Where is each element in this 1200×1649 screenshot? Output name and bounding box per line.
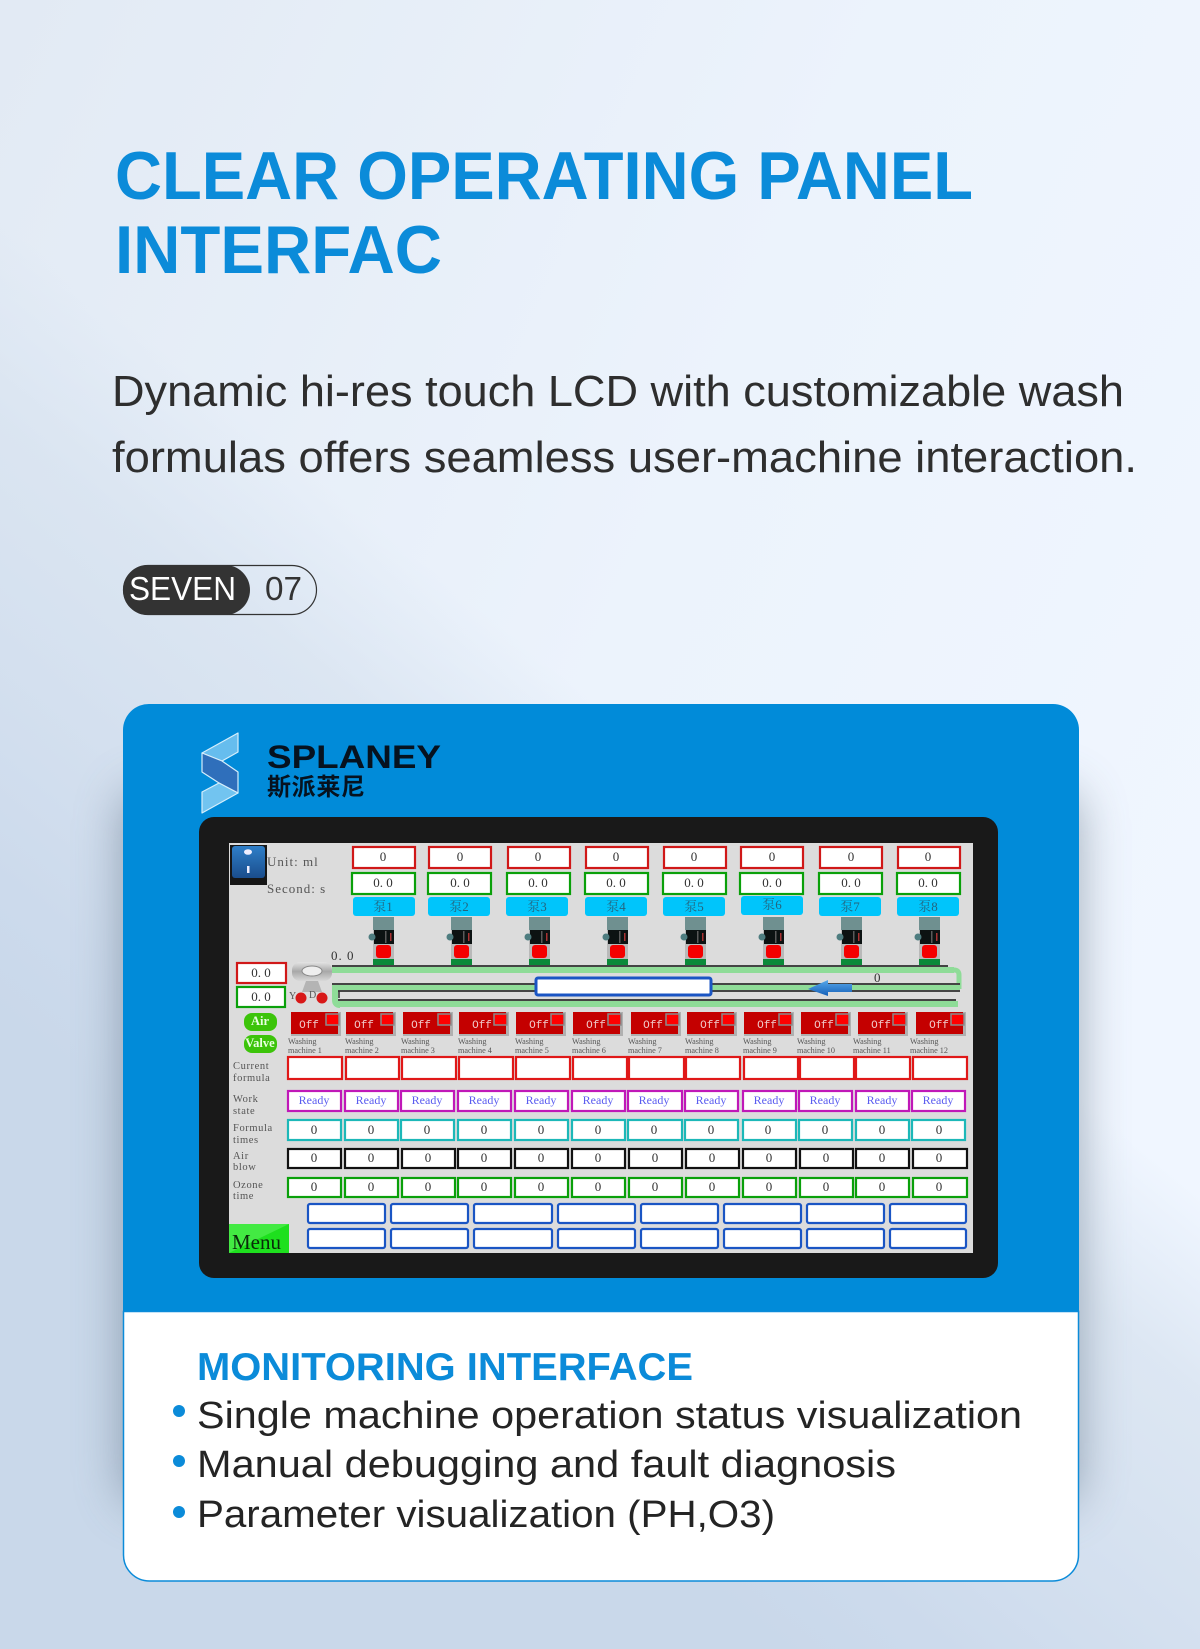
- row: air blow: 0: [766, 1150, 772, 1165]
- row labels: Ozone: [233, 1180, 263, 1191]
- row: work state: Ready: [299, 1093, 329, 1107]
- pump name tabs: 泵4: [606, 899, 626, 914]
- washing machine labels: Washing: [910, 1037, 938, 1046]
- pump seconds boxes: 0. 0: [373, 875, 393, 890]
- subtitle text: formulas offers seamless user-machine interaction.: [112, 433, 1137, 482]
- washing machine labels: machine 6: [572, 1046, 606, 1055]
- row: ozone time: 0: [595, 1179, 601, 1194]
- pump amount boxes: 0: [691, 849, 697, 864]
- row labels: Air: [233, 1151, 249, 1162]
- brand name: 斯派莱尼: [267, 774, 365, 801]
- row: work state: Ready: [356, 1093, 386, 1107]
- step badge: SEVEN 07: 07: [265, 570, 302, 607]
- pump amount boxes: 0: [769, 849, 775, 864]
- machine off switches: Off: [929, 1020, 949, 1032]
- pump seconds boxes: 0. 0: [450, 875, 470, 890]
- unit labels: Second: s: [267, 881, 326, 896]
- flow arrow: [808, 980, 852, 996]
- unit labels: [267, 854, 326, 896]
- pump amount boxes: 0: [457, 849, 463, 864]
- row labels: times: [233, 1135, 259, 1146]
- pipework: [332, 965, 960, 1007]
- row: work state: Ready: [696, 1093, 726, 1107]
- pump seconds boxes: 0. 0: [528, 875, 548, 890]
- pump seconds boxes: 0. 0: [841, 875, 861, 890]
- machine off switches: Off: [643, 1020, 663, 1032]
- icon: info button: [230, 845, 267, 885]
- row: formula times: 0: [879, 1122, 885, 1137]
- row: work state: Ready: [867, 1093, 897, 1107]
- inlet boxes: [237, 963, 286, 1007]
- row: formula times: 0: [651, 1122, 657, 1137]
- row: formula times: 0: [595, 1122, 601, 1137]
- washing machine labels: machine 2: [345, 1046, 379, 1055]
- washing machine labels: machine 4: [458, 1046, 492, 1055]
- row: current formula: [288, 1057, 967, 1079]
- row: work state: [288, 1091, 965, 1111]
- air and valve buttons: Valve: [245, 1036, 275, 1050]
- title: INTERFAC: [115, 212, 442, 288]
- menu button: [229, 1224, 289, 1254]
- row: work state: Ready: [583, 1093, 613, 1107]
- pump name tabs: 泵5: [684, 899, 704, 914]
- row: work state: Ready: [469, 1093, 499, 1107]
- subtitle text: Dynamic hi-res touch LCD with customizable wash: [112, 367, 1124, 416]
- pump seconds boxes: 0. 0: [606, 875, 626, 890]
- step badge: SEVEN 07: SEVEN: [129, 570, 236, 607]
- row: work state: Ready: [754, 1093, 784, 1107]
- row: air blow: 0: [652, 1150, 658, 1165]
- machine off switches: Off: [871, 1020, 891, 1032]
- washing machine labels: machine 1: [288, 1046, 322, 1055]
- panel: monitoring interface: [124, 1312, 1078, 1581]
- row: formula times: [288, 1120, 965, 1140]
- washing machine labels: machine 7: [628, 1046, 662, 1055]
- row: air blow: 0: [481, 1150, 487, 1165]
- washing machine labels: [288, 1037, 948, 1055]
- machine off switches: Off: [757, 1020, 777, 1032]
- washing machine labels: Washing: [853, 1037, 881, 1046]
- pump amount boxes: [353, 847, 960, 868]
- row: work state: Ready: [526, 1093, 556, 1107]
- row: air blow: 0: [879, 1150, 885, 1165]
- washing machine labels: Washing: [515, 1037, 543, 1046]
- feature list: Single machine operation status visualization: [197, 1395, 1022, 1437]
- monitoring heading: MONITORING INTERFACE: [197, 1346, 693, 1389]
- row labels: state: [233, 1106, 255, 1117]
- feature list: Manual debugging and fault diagnosis: [197, 1444, 896, 1486]
- inlet boxes: 0. 0: [251, 965, 271, 980]
- machine off switches: [291, 1012, 966, 1036]
- HMI screen: [229, 843, 973, 1254]
- pump amount boxes: 0: [925, 849, 931, 864]
- row: formula times: 0: [765, 1122, 771, 1137]
- icon: S hexagon logo: [202, 733, 238, 813]
- row: ozone time: [288, 1178, 967, 1197]
- row: ozone time: 0: [538, 1179, 544, 1194]
- row: formula times: 0: [424, 1122, 430, 1137]
- pump name tabs: 泵7: [840, 899, 860, 914]
- row: ozone time: 0: [368, 1179, 374, 1194]
- pump name tabs: 泵3: [527, 899, 547, 914]
- dosing pumps: [368, 917, 940, 965]
- row: ozone time: 0: [481, 1179, 487, 1194]
- pump name tabs: 泵2: [449, 899, 469, 914]
- row labels: blow: [233, 1162, 256, 1173]
- washing machine labels: Washing: [288, 1037, 316, 1046]
- washing machine labels: Washing: [401, 1037, 429, 1046]
- unit labels: Unit: ml: [267, 854, 319, 869]
- row: formula times: 0: [481, 1122, 487, 1137]
- title: [115, 138, 973, 288]
- subtitle text: [112, 367, 1137, 482]
- pipe readouts: 0. 0: [331, 948, 354, 963]
- row: ozone time: 0: [936, 1179, 942, 1194]
- washing machine labels: Washing: [458, 1037, 486, 1046]
- brand name: SPLANEY: [267, 739, 441, 775]
- washing machine labels: machine 10: [797, 1046, 835, 1055]
- row: ozone time: 0: [425, 1179, 431, 1194]
- menu button: Menu: [232, 1230, 281, 1254]
- step badge: SEVEN 07: [123, 565, 316, 615]
- pump seconds boxes: [352, 873, 960, 894]
- washing machine labels: Washing: [797, 1037, 825, 1046]
- pump name tabs: 泵1: [373, 899, 393, 914]
- row: formula times: 0: [311, 1122, 317, 1137]
- row: work state: Ready: [923, 1093, 953, 1107]
- row: formula times: 0: [368, 1122, 374, 1137]
- row: air blow: 0: [823, 1150, 829, 1165]
- brand name: [267, 739, 441, 801]
- pump amount boxes: 0: [613, 849, 619, 864]
- row: formula times: 0: [822, 1122, 828, 1137]
- pump seconds boxes: 0. 0: [918, 875, 938, 890]
- row: air blow: 0: [936, 1150, 942, 1165]
- pump seconds boxes: 0. 0: [684, 875, 704, 890]
- washing machine labels: Washing: [628, 1037, 656, 1046]
- washing machine labels: Washing: [345, 1037, 373, 1046]
- row: air blow: 0: [538, 1150, 544, 1165]
- row labels: time: [233, 1191, 254, 1202]
- row: ozone time: 0: [766, 1179, 772, 1194]
- washing machine labels: Washing: [685, 1037, 713, 1046]
- row: work state: Ready: [639, 1093, 669, 1107]
- row: formula times: 0: [538, 1122, 544, 1137]
- pipe readouts: 0: [874, 970, 882, 985]
- row: air blow: 0: [368, 1150, 374, 1165]
- row: formula times: 0: [936, 1122, 942, 1137]
- machine off switches: Off: [529, 1020, 549, 1032]
- washing machine labels: machine 5: [515, 1046, 549, 1055]
- row: ozone time: 0: [652, 1179, 658, 1194]
- row: ozone time: 0: [311, 1179, 317, 1194]
- row: air blow: [288, 1149, 967, 1168]
- row labels: [233, 1061, 273, 1202]
- row: air blow: 0: [425, 1150, 431, 1165]
- machine off switches: Off: [586, 1020, 606, 1032]
- row: air blow: 0: [709, 1150, 715, 1165]
- air and valve buttons: Air: [251, 1014, 269, 1028]
- row labels: Formula: [233, 1123, 273, 1134]
- row: work state: Ready: [412, 1093, 442, 1107]
- row: air blow: 0: [595, 1150, 601, 1165]
- washing machine labels: Washing: [743, 1037, 771, 1046]
- pump name tabs: [353, 896, 959, 916]
- pipe readouts: [331, 948, 882, 985]
- row: ozone time: 0: [709, 1179, 715, 1194]
- row: air blow: 0: [311, 1150, 317, 1165]
- blue card header: [123, 704, 1079, 1311]
- row: ozone time: 0: [879, 1179, 885, 1194]
- icon: main valve: Y: [289, 991, 296, 1002]
- pump seconds boxes: 0. 0: [762, 875, 782, 890]
- pump name tabs: 泵8: [918, 899, 938, 914]
- row: work state: Ready: [810, 1093, 840, 1107]
- pump name tabs: 泵6: [762, 897, 782, 912]
- card shadow: [123, 790, 1079, 1505]
- icon: main valve: [289, 962, 332, 1004]
- feature list: Parameter visualization (PH,O3): [197, 1494, 775, 1536]
- logo: [202, 733, 441, 813]
- pump amount boxes: 0: [380, 849, 386, 864]
- row: formula times: 0: [708, 1122, 714, 1137]
- machine off switches: Off: [700, 1020, 720, 1032]
- washing machine labels: machine 12: [910, 1046, 948, 1055]
- machine off switches: Off: [472, 1020, 492, 1032]
- feature list: [173, 1395, 1022, 1536]
- icon: main valve: D: [309, 990, 316, 1001]
- row labels: Work: [233, 1094, 259, 1105]
- row: ozone time: 0: [823, 1179, 829, 1194]
- inlet boxes: 0. 0: [251, 989, 271, 1004]
- pump amount boxes: 0: [848, 849, 854, 864]
- washing machine labels: Washing: [572, 1037, 600, 1046]
- machine off switches: Off: [299, 1020, 319, 1032]
- machine off switches: Off: [814, 1020, 834, 1032]
- washing machine labels: machine 9: [743, 1046, 777, 1055]
- washing machine labels: machine 3: [401, 1046, 435, 1055]
- blue status boxes: [308, 1204, 966, 1248]
- machine off switches: Off: [411, 1020, 431, 1032]
- row labels: formula: [233, 1073, 270, 1084]
- title: CLEAR OPERATING PANEL: [115, 138, 973, 214]
- row labels: Current: [233, 1061, 269, 1072]
- washing machine labels: machine 11: [853, 1046, 891, 1055]
- washing machine labels: machine 8: [685, 1046, 719, 1055]
- machine off switches: Off: [354, 1020, 374, 1032]
- pump amount boxes: 0: [535, 849, 541, 864]
- touch screen bezel: [199, 817, 998, 1278]
- panel: product card: [123, 704, 1079, 1581]
- air and valve buttons: [244, 1013, 277, 1053]
